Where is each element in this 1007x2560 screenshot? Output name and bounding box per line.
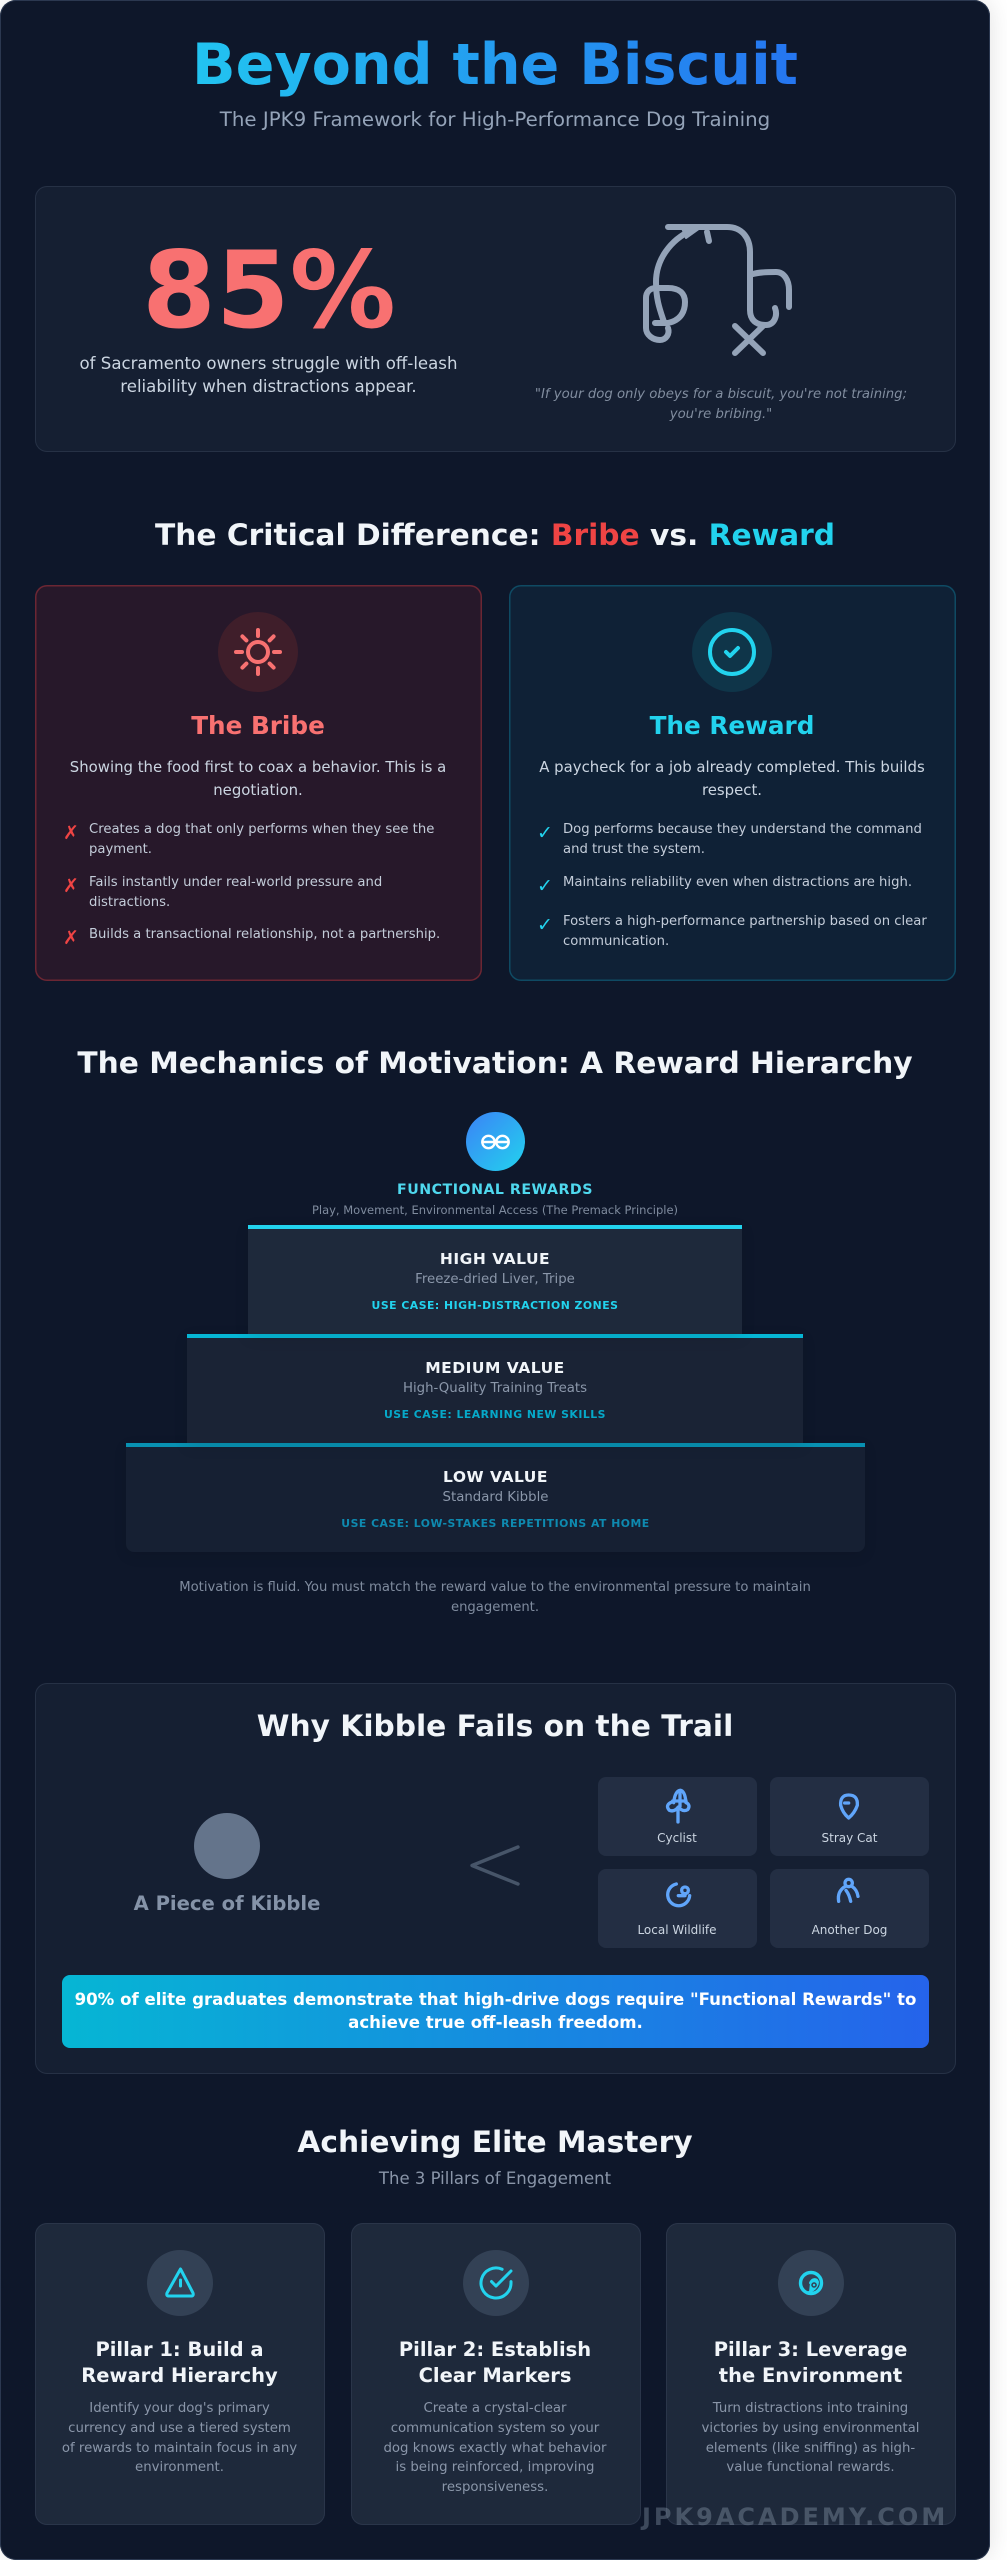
pillar 3 text: victories by using environmental (702, 2421, 919, 2436)
pillar 3 heading: Pillar 3: Leverage (714, 2338, 907, 2360)
callout text: 90% of elite graduates demonstrate that high-drive dogs require "Functional Rewards" to (75, 1990, 916, 2009)
kibble heading: Why Kibble Fails on the Trail (257, 1709, 733, 1744)
kibble circle (194, 1813, 260, 1879)
pillar 1 heading (81, 2338, 278, 2387)
pillar 2 text (383, 2401, 607, 2495)
local wildlife label: Local Wildlife (637, 1923, 717, 1937)
pillar 3 text: Turn distractions into training (713, 2401, 908, 2416)
bribe point 3 (63, 927, 440, 949)
statistic description (80, 354, 457, 396)
pillar 2 heading: Clear Markers (419, 2364, 571, 2387)
quote (535, 387, 907, 422)
pillar 1 heading: Reward Hierarchy (81, 2364, 278, 2387)
quote: "If your dog only obeys for a biscuit, you're not training; (535, 387, 907, 402)
icon: stray cat (838, 1793, 859, 1820)
bribe point 2: Fails instantly under real-world pressure and (89, 875, 382, 890)
tier: medium value (187, 1334, 803, 1442)
bribe point 2: ✗ (63, 875, 79, 897)
high value use case: USE CASE: HIGH-DISTRACTION ZONES (372, 1298, 618, 1312)
tier: low value (126, 1442, 865, 1552)
reward point 3: Fosters a high-performance partnership based on clear (563, 914, 927, 929)
section subtitle: pillars: The 3 Pillars of Engagement (379, 2169, 611, 2188)
pillar 2 card (350, 2223, 640, 2525)
less than symbol (470, 1845, 520, 1886)
bribe point 1 (63, 822, 434, 857)
distraction: local wildlife (598, 1869, 756, 1948)
tier: high value (248, 1224, 742, 1334)
kibble label: A Piece of Kibble (134, 1892, 320, 1915)
hierarchy note: engagement. (451, 1600, 539, 1615)
low value foods: Standard Kibble (443, 1490, 548, 1504)
functional rewards label: FUNCTIONAL REWARDS (397, 1182, 593, 1198)
bribe point 2: distractions. (89, 895, 170, 910)
panel: the reward (509, 585, 956, 981)
bribe point 2 (63, 875, 382, 910)
section heading: mechanics of motivation: The Mechanics of Motivation: A Reward Hierarchy (77, 1046, 913, 1080)
section heading: elite mastery: Achieving Elite Mastery (297, 2125, 693, 2160)
icon: another dog (836, 1878, 860, 1903)
pillar 3 text: value functional rewards. (726, 2460, 895, 2475)
statistic description: of Sacramento owners struggle with off-leash (80, 354, 457, 373)
pillar 3 text: elements (like sniffing) as high- (706, 2441, 915, 2456)
callout text (75, 1990, 916, 2032)
callout: elite graduates (62, 1975, 929, 2048)
pillar 1 card (35, 2223, 325, 2525)
reward point 1: ✓ (537, 822, 553, 844)
pillar 3 card (666, 2223, 956, 2525)
pillar 1 text: Identify your dog's primary (89, 2401, 270, 2416)
pillar 2 text: is being reinforced, improving (396, 2460, 594, 2475)
bribe point 1: Creates a dog that only performs when they see the (89, 822, 434, 837)
big statistic: 85% (142, 229, 396, 352)
reward description: A paycheck for a job already completed. This builds (539, 758, 925, 776)
hierarchy note (179, 1580, 811, 1615)
hierarchy note: Motivation is fluid. You must match the reward value to the environmental pressure to maintain (179, 1580, 811, 1595)
reward point 3: ✓ (537, 914, 553, 936)
reward point 3 (537, 914, 927, 949)
reward point 1: and trust the system. (563, 842, 705, 857)
pillar 1 text: currency and use a tiered system (68, 2421, 291, 2436)
reward point 1: Dog performs because they understand the command (563, 822, 922, 837)
icon: globe (778, 2250, 844, 2316)
medium value foods: High-Quality Training Treats (403, 1380, 587, 1396)
reward description: respect. (702, 781, 762, 799)
panel: why kibble fails (35, 1683, 956, 2074)
title: Beyond the Biscuit (192, 32, 798, 98)
icon: cyclist (666, 1788, 691, 1824)
bribe point 1: ✗ (63, 822, 79, 844)
pillar 1 text: of rewards to maintain focus in any (62, 2441, 297, 2456)
reward description (539, 758, 925, 799)
panel: 85 percent statistic (35, 186, 956, 452)
icon: warning triangle (147, 2250, 213, 2316)
callout text: achieve true off-leash freedom. (348, 2013, 643, 2032)
reward point 2 (537, 875, 912, 897)
pillar 3 heading (714, 2338, 907, 2387)
high value label: HIGH VALUE (440, 1250, 550, 1268)
pillar 2 text: Create a crystal-clear (423, 2401, 567, 2416)
pillar 3 heading: the Environment (719, 2364, 902, 2387)
bribe description: negotiation. (213, 781, 303, 799)
statistic description: reliability when distractions appear. (120, 377, 417, 396)
subtitle: The JPK9 Framework for High-Performance Dog Training (220, 108, 770, 131)
reward heading: The Reward (650, 711, 814, 740)
low value use case: USE CASE: LOW-STAKES REPETITIONS AT HOME (341, 1516, 650, 1530)
icon: functional rewards infinity badge (466, 1112, 525, 1171)
high value foods: Freeze-dried Liver, Tripe (415, 1272, 575, 1286)
icon: check circle (462, 2250, 528, 2316)
reward point 3: communication. (563, 934, 669, 949)
pillar 2 text: communication system so your (391, 2421, 599, 2436)
pillar 2 text: dog knows exactly what behavior (383, 2441, 607, 2456)
bribe point 1: payment. (89, 842, 152, 857)
distraction: another dog (770, 1869, 929, 1948)
reward point 2: ✓ (537, 875, 553, 897)
pillar 2 heading: Pillar 2: Establish (399, 2338, 591, 2360)
icon: check circle (692, 612, 772, 692)
distraction: stray cat (770, 1777, 929, 1856)
icon: dog outline with x (643, 224, 792, 356)
stray cat label: Stray Cat (822, 1831, 877, 1845)
functional rewards description: Play, Movement, Environmental Access (The Premack Principle) (312, 1203, 678, 1217)
reward point 1 (537, 822, 922, 857)
bribe heading: The Bribe (191, 711, 325, 740)
panel: the bribe (35, 585, 482, 981)
bribe point 3: ✗ (63, 927, 79, 949)
icon: local wildlife (666, 1882, 692, 1908)
bribe description (70, 758, 446, 799)
another dog label: Another Dog (812, 1923, 887, 1937)
pillar 1 heading: Pillar 1: Build a (95, 2338, 264, 2360)
pillar 2 text: responsiveness. (442, 2480, 548, 2495)
pillar 2 heading (399, 2338, 591, 2387)
pillar 3 text (702, 2401, 919, 2475)
cyclist label: Cyclist (657, 1831, 697, 1845)
low value label: LOW VALUE (443, 1468, 548, 1486)
quote: you're bribing." (670, 407, 772, 422)
pillar 1 text: environment. (135, 2460, 224, 2475)
bribe point 3: Builds a transactional relationship, not a partnership. (89, 927, 440, 942)
medium value use case: USE CASE: LEARNING NEW SKILLS (384, 1408, 606, 1420)
medium value label: MEDIUM VALUE (425, 1358, 565, 1376)
reward point 2: Maintains reliability even when distractions are high. (563, 875, 912, 890)
icon: sun lure (218, 612, 298, 692)
section heading: critical difference: The Critical Difference: Bribe vs. Reward (155, 518, 835, 552)
watermark: JPK9ACADEMY.COM (642, 2503, 948, 2531)
distraction: cyclist (598, 1777, 756, 1856)
pillar 1 text (62, 2401, 297, 2475)
bribe description: Showing the food first to coax a behavior. This is a (70, 758, 446, 776)
